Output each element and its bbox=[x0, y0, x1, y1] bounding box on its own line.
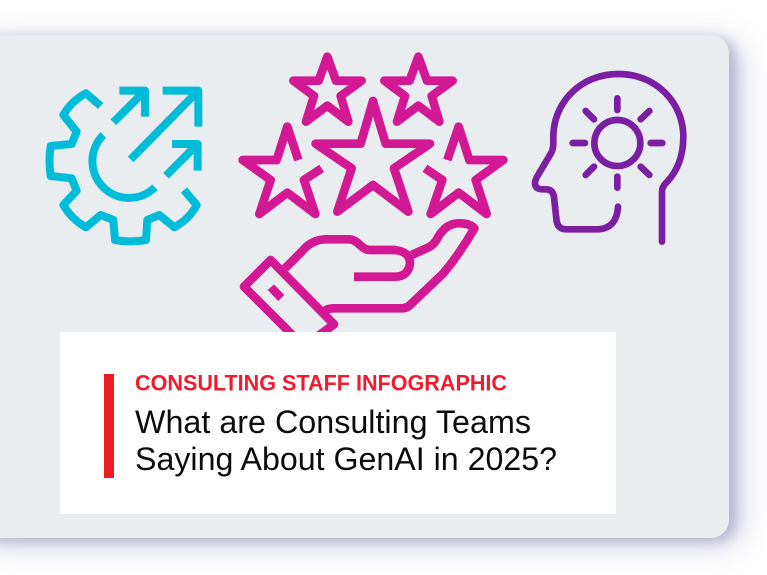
eyebrow heading: CONSULTING STAFF INFOGRAPHIC bbox=[135, 370, 507, 396]
icon: head with sun bbox=[532, 70, 687, 245]
icon: gear with growth arrows bbox=[46, 86, 202, 246]
panel: title block bbox=[60, 332, 616, 514]
icon: hand holding five stars bbox=[238, 52, 508, 332]
red accent bar bbox=[104, 374, 114, 478]
main title: Saying About GenAI in 2025? bbox=[135, 441, 557, 477]
main title: What are Consulting Teams bbox=[135, 404, 531, 440]
